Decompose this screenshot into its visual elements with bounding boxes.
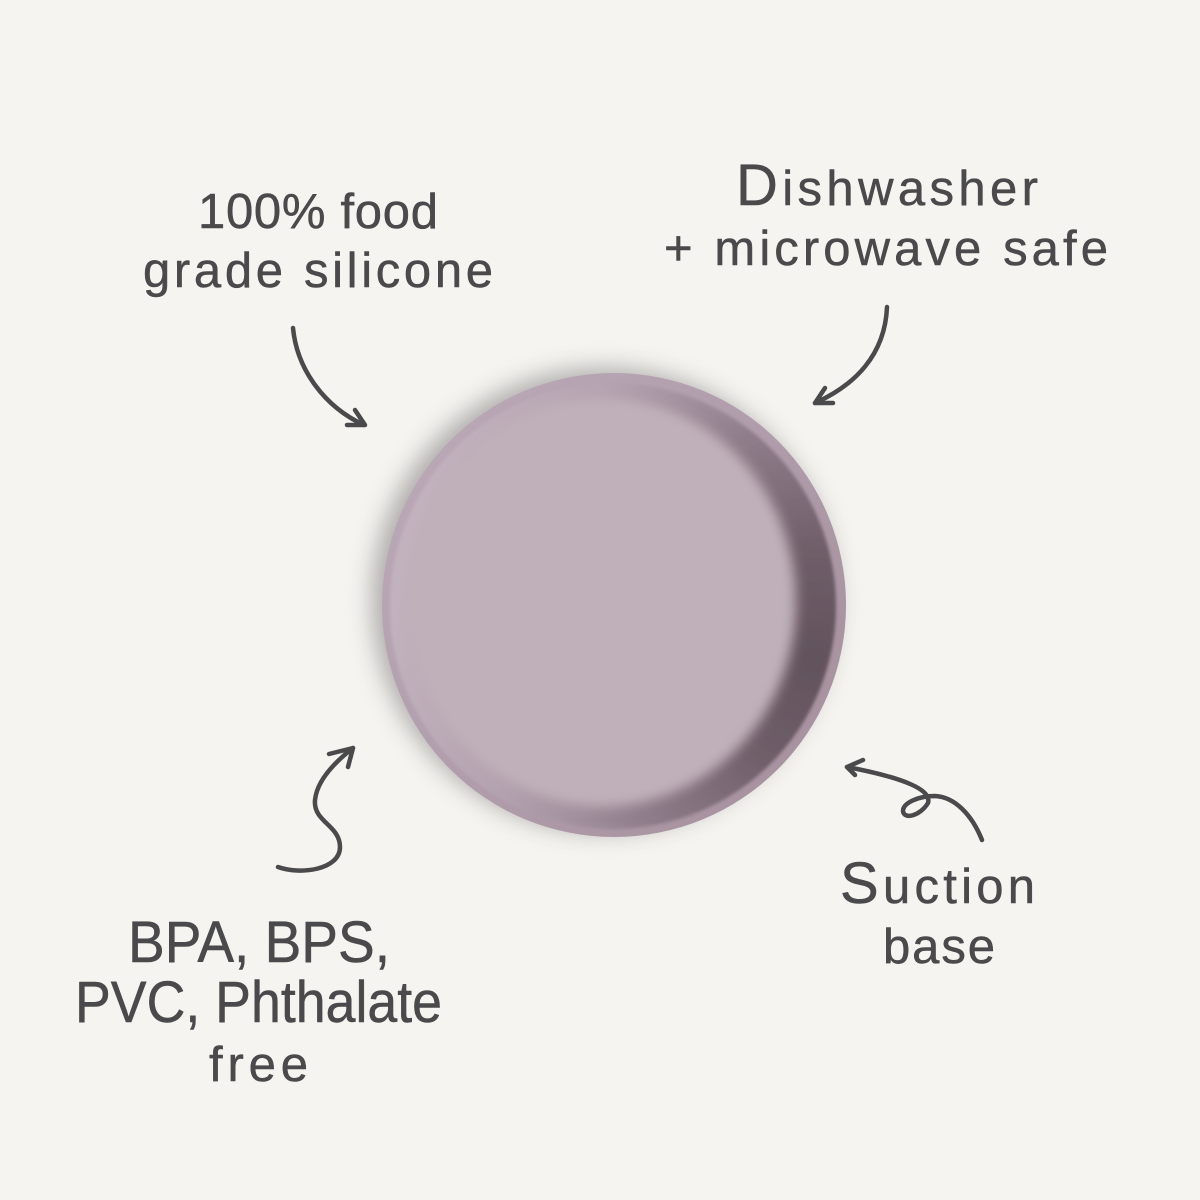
- label line 2: base: [883, 920, 995, 974]
- plate shadow: [372, 368, 836, 832]
- label line 2: PVC, Phthalate: [75, 970, 442, 1035]
- callout: suction base: [840, 851, 1035, 974]
- plate: [372, 368, 846, 837]
- plate floor: [408, 397, 796, 807]
- arrow: suction base: [847, 760, 982, 840]
- plate inner wall: [390, 383, 836, 829]
- label line 2: grade silicone: [143, 244, 493, 298]
- arrow: dishwasher and microwave safe: [815, 307, 887, 403]
- arrow: food grade silicone: [293, 328, 365, 425]
- plate outer rim: [382, 373, 846, 837]
- label line 3: free: [209, 1038, 308, 1092]
- arrow: BPA free: [278, 748, 353, 871]
- label line 2: + microwave safe: [664, 222, 1108, 276]
- label line 1: Suction: [840, 851, 1035, 916]
- label line 1: 100% food: [198, 185, 438, 239]
- callout: food grade silicone: [143, 185, 493, 298]
- callout: BPA, BPS, PVC, Phthalate free: [75, 910, 442, 1092]
- callout: dishwasher and microwave safe: [664, 153, 1108, 276]
- label line 1: BPA, BPS,: [128, 910, 390, 975]
- label line 1: Dishwasher: [736, 153, 1038, 218]
